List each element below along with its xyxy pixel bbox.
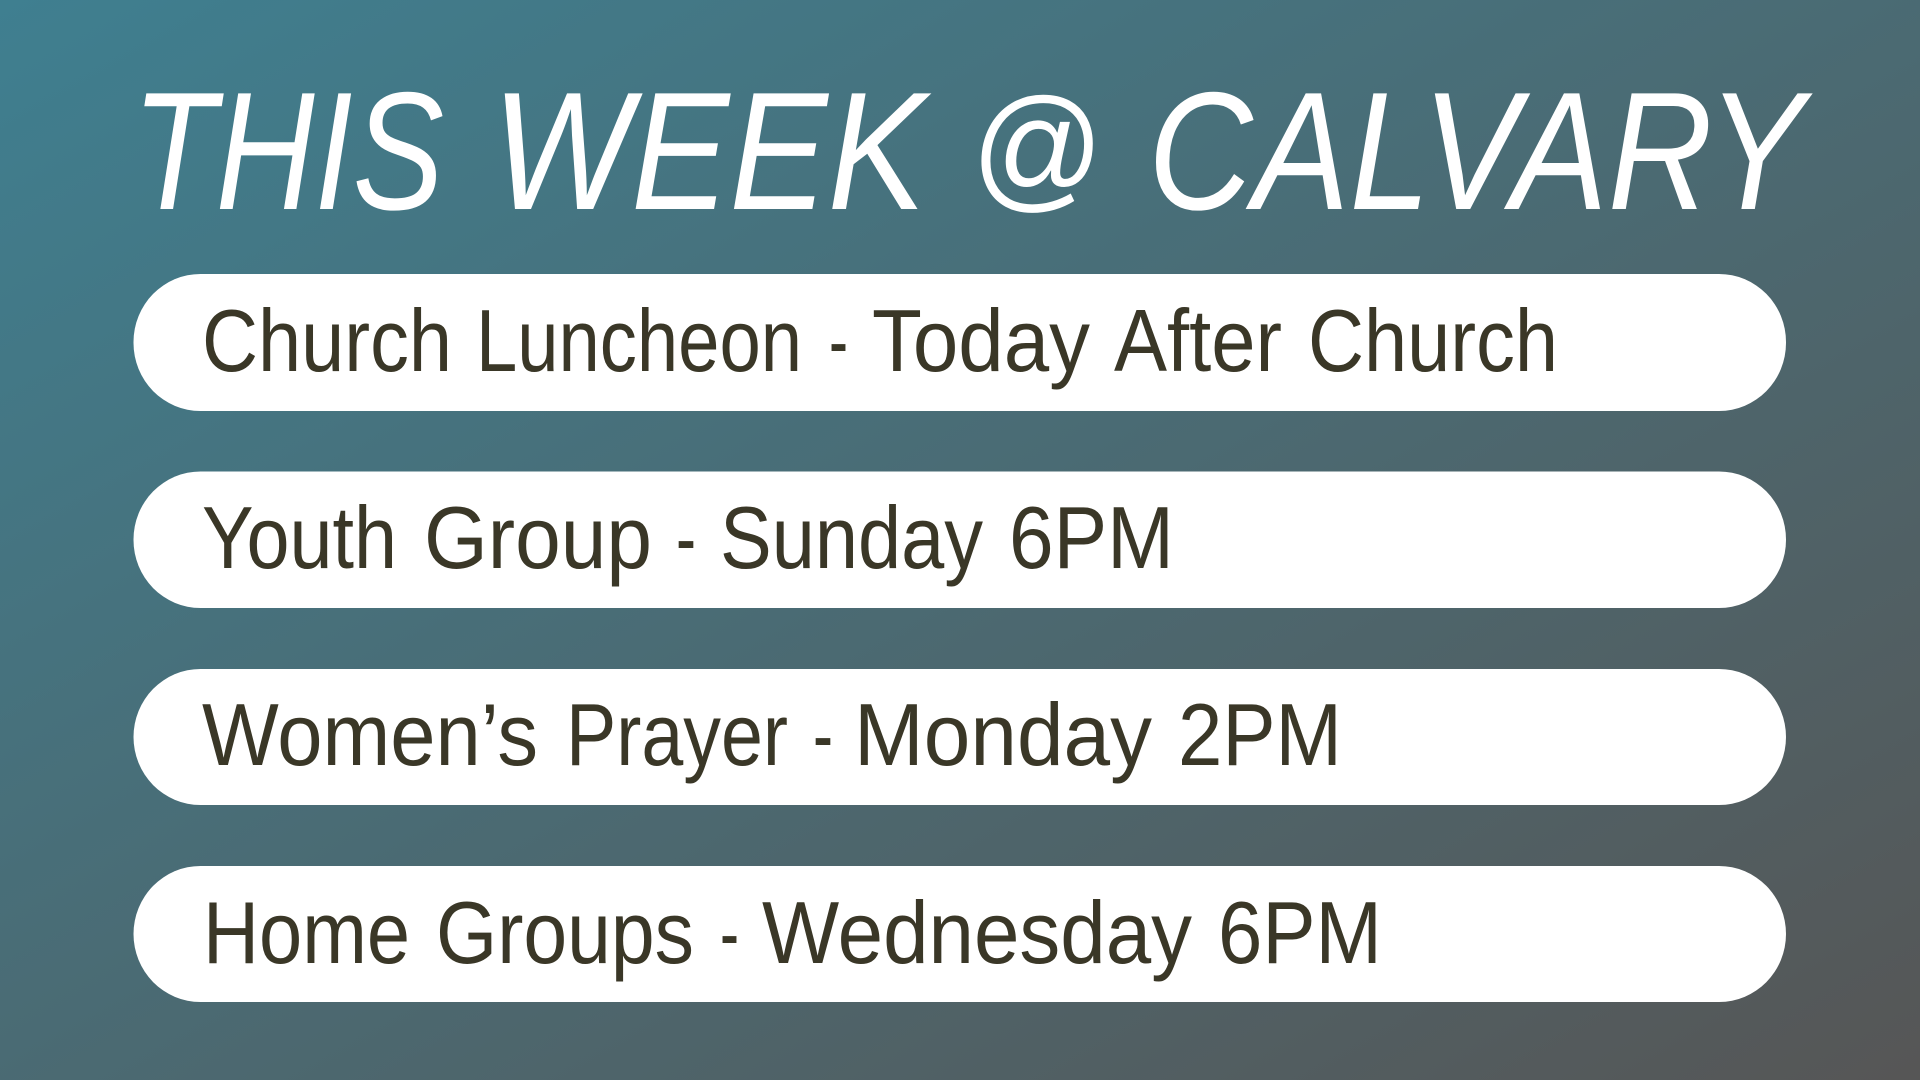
- text: home groups: [203, 883, 1382, 982]
- title: THIS: [132, 57, 444, 245]
- text: women's prayer: 2PM: [1178, 685, 1342, 784]
- text: youth group: Sunday: [720, 488, 983, 587]
- text: women's prayer: [202, 685, 1342, 784]
- text: church luncheon: Today: [872, 291, 1090, 390]
- text: women's prayer: Monday: [854, 685, 1152, 784]
- text: youth group: -: [676, 488, 696, 587]
- text: youth group: Group: [424, 488, 652, 587]
- text: youth group: [202, 488, 1174, 587]
- text: church luncheon: Luncheon: [476, 291, 802, 390]
- text: church luncheon: Church: [202, 291, 452, 390]
- text: church luncheon: -: [829, 291, 848, 390]
- title: WEEK: [492, 57, 932, 245]
- text: women's prayer: -: [813, 685, 833, 784]
- title: CALVARY: [1148, 57, 1813, 245]
- text: home groups: Groups: [436, 883, 694, 982]
- panel: church luncheon: [134, 274, 1786, 411]
- text: home groups: 6PM: [1218, 883, 1382, 982]
- text: home groups: Wednesday: [762, 883, 1192, 982]
- panel: youth group: [134, 472, 1786, 608]
- text: women's prayer: Prayer: [566, 685, 788, 784]
- panel: home groups: [134, 866, 1786, 1002]
- text: home groups: Home: [203, 883, 410, 982]
- text: youth group: Youth: [202, 488, 397, 587]
- text: home groups: -: [720, 883, 739, 982]
- text: youth group: 6PM: [1009, 488, 1174, 587]
- text: church luncheon: Church: [1308, 291, 1558, 390]
- title: [132, 57, 1813, 245]
- title: @: [969, 71, 1102, 224]
- panel: women's prayer: [134, 669, 1786, 805]
- text: women's prayer: Women’s: [202, 685, 538, 784]
- text: church luncheon: After: [1114, 291, 1282, 390]
- text: church luncheon: [202, 291, 1558, 390]
